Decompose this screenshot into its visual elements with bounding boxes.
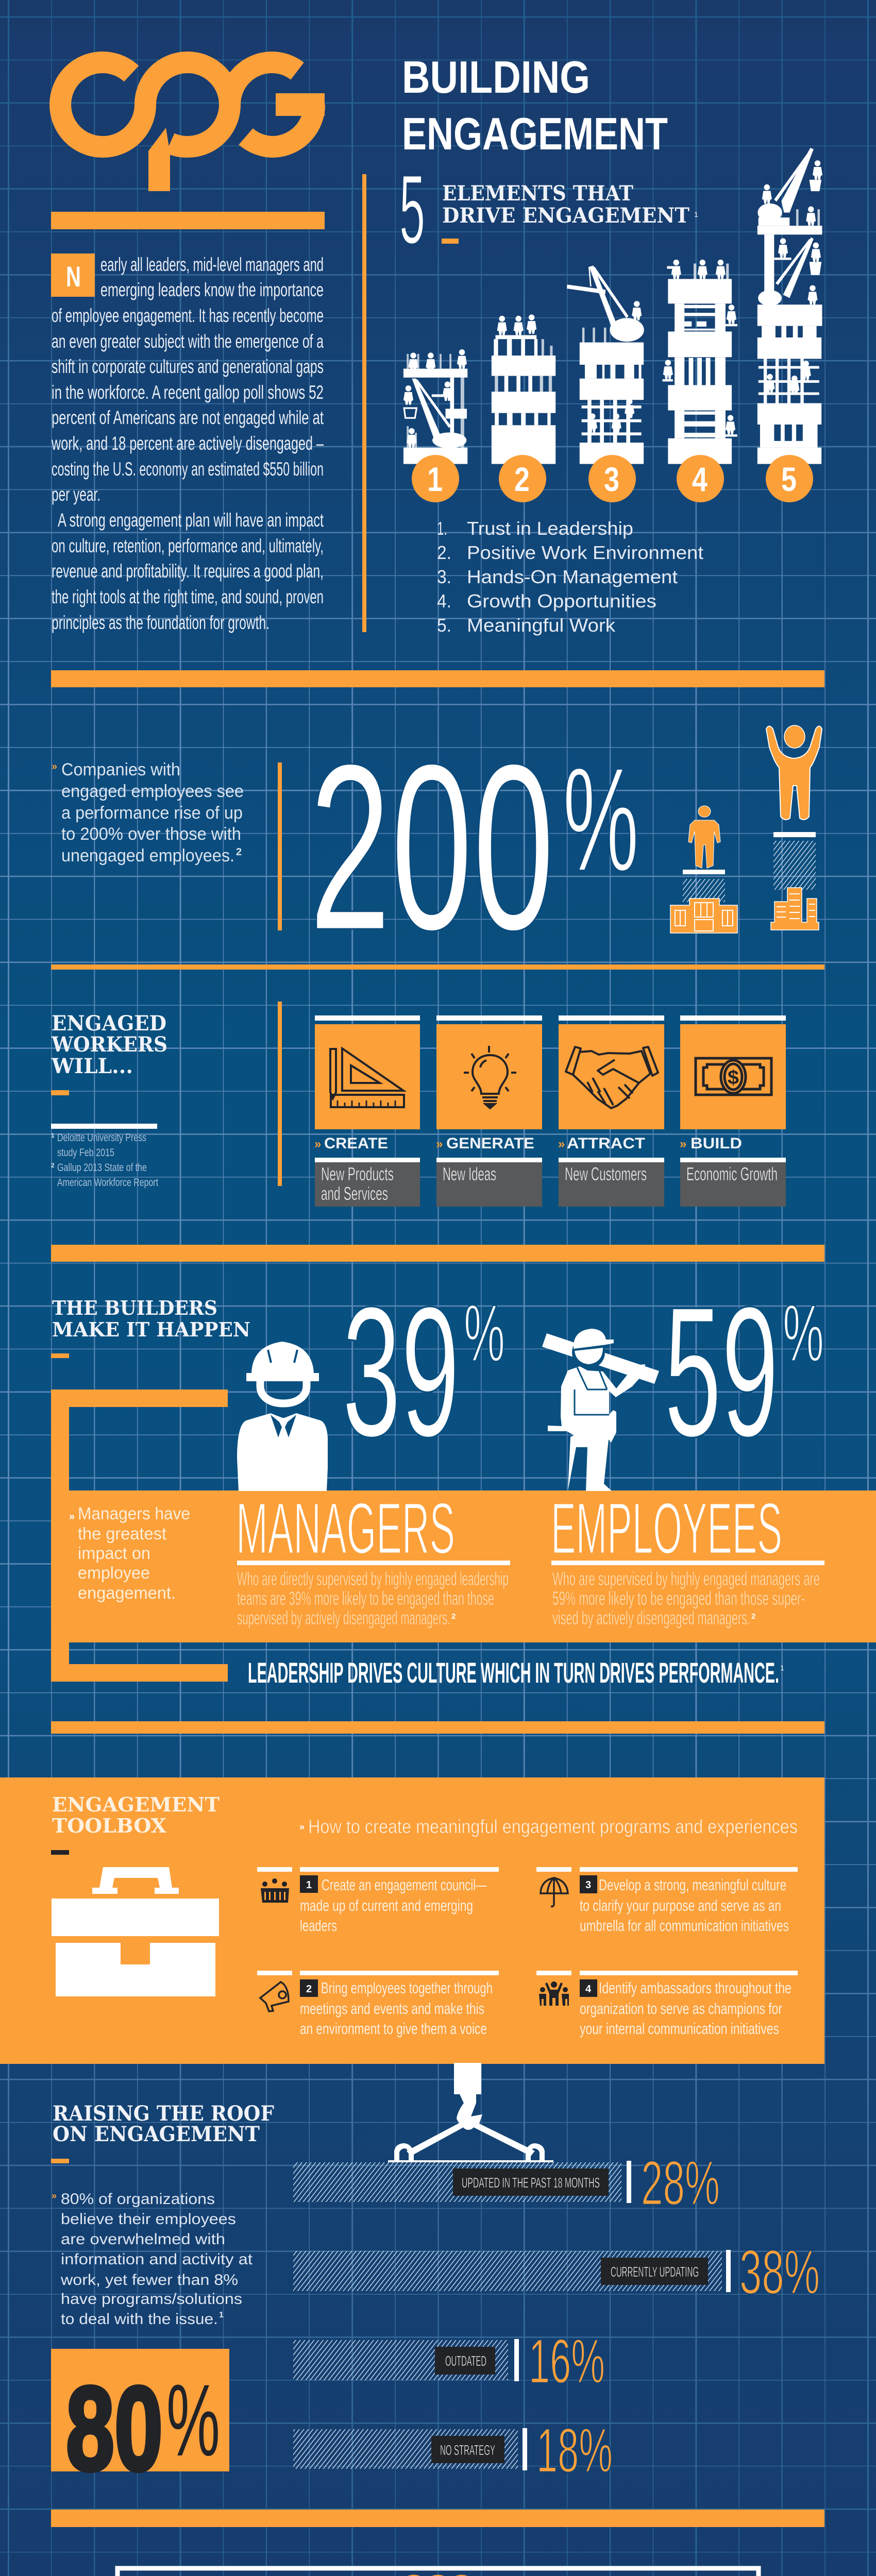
intro text block: of employee engagement. It has recently become bbox=[52, 305, 324, 326]
list: five elements: Meaningful Work bbox=[467, 615, 616, 636]
vertical divider bbox=[278, 1002, 282, 1186]
text block: 80 percent of organizations: are overwhelmed with bbox=[61, 2231, 225, 2248]
big number 200%: % bbox=[563, 737, 639, 903]
section bar bbox=[51, 670, 824, 687]
intro line: How to create meaningful engagement programs and experiences bbox=[308, 1816, 798, 1837]
intro text block: per year. bbox=[52, 484, 100, 505]
big number 200%: 200 bbox=[309, 715, 554, 979]
intro line: » bbox=[299, 1822, 305, 1832]
heading accent dash bbox=[51, 1090, 69, 1095]
item 2 bbox=[257, 1971, 499, 2038]
text block: 80 percent of organizations bbox=[52, 2191, 253, 2328]
intro text block: early all leaders, mid-level managers and bbox=[100, 254, 324, 275]
card: generate: New Ideas bbox=[443, 1163, 496, 1184]
icon: people group bbox=[261, 1878, 289, 1903]
heading: 5 elements: DRIVE ENGAGEMENT bbox=[442, 204, 689, 228]
text block: managers impact: Managers have bbox=[78, 1504, 190, 1523]
icon: ambassadors bbox=[539, 1981, 569, 2006]
item 1: made up of current and emerging bbox=[300, 1896, 473, 1914]
icon: megaphone bbox=[260, 1982, 289, 2011]
list: five elements: 3. bbox=[437, 566, 451, 587]
chart: five building towers bbox=[403, 148, 822, 464]
stat: 59 percent: 59 bbox=[664, 1268, 779, 1476]
list: five elements: Positive Work Environment bbox=[467, 542, 703, 563]
managers label and text bbox=[236, 1487, 510, 1629]
stat: 59 percent: % bbox=[783, 1288, 824, 1379]
bar: currently updating bbox=[293, 2237, 820, 2307]
intro text block: the right tools at the right time, and sound, proven bbox=[52, 586, 324, 607]
item 2: Bring employees together through bbox=[321, 1979, 493, 1997]
item 3: Develop a strong, meaningful culture bbox=[599, 1876, 786, 1894]
heading: ON ENGAGEMENT bbox=[53, 2122, 260, 2146]
list: five elements: 1. bbox=[437, 518, 447, 539]
item 1 bbox=[257, 1867, 499, 1935]
text block: companies: Companies with bbox=[61, 760, 180, 779]
icon: toolbox bbox=[52, 1867, 219, 1996]
icon: ruler and pencil bbox=[330, 1048, 404, 1107]
item 3: umbrella for all communication initiatives bbox=[580, 1917, 789, 1935]
item 4: your internal communication initiatives bbox=[580, 2020, 779, 2038]
card: create: » bbox=[314, 1137, 321, 1151]
vertical divider bbox=[278, 762, 282, 930]
heading accent dash bbox=[51, 2159, 69, 2163]
stat box: 80 percent: % bbox=[166, 2363, 220, 2477]
card: generate bbox=[436, 1015, 542, 1207]
footnotes: Gallup 2013 State of the bbox=[57, 1162, 147, 1174]
card: create: New Products bbox=[321, 1163, 394, 1184]
intro text block: shift in corporate cultures and generational gaps bbox=[52, 356, 324, 377]
orange bracket and band bbox=[51, 1389, 876, 1682]
item 3 bbox=[536, 1867, 798, 1935]
tower 4 bbox=[663, 260, 737, 464]
bar: no strategy bbox=[293, 2415, 613, 2485]
item 4: organization to serve as champions for bbox=[580, 1999, 782, 2018]
panel: engagement toolbox bbox=[0, 1777, 824, 2064]
item 1: Create an engagement council— bbox=[322, 1876, 487, 1894]
list: five elements: 5. bbox=[437, 615, 451, 636]
heading: RAISING THE ROOF bbox=[53, 2102, 274, 2126]
card: generate: » bbox=[436, 1137, 443, 1151]
intro text block: revenue and profitability. It requires a good plan, bbox=[52, 561, 324, 582]
item 1: 1 bbox=[306, 1879, 312, 1891]
text block: managers impact: engagement. bbox=[78, 1583, 176, 1602]
panel: the builders bbox=[51, 1268, 876, 1689]
drop cap: N bbox=[66, 260, 81, 293]
panel: 200 percent bbox=[52, 715, 822, 979]
footnotes: American Workforce Report bbox=[57, 1177, 158, 1189]
heading: 5 elements: 1 bbox=[694, 210, 698, 218]
text block: managers impact: impact on bbox=[78, 1544, 150, 1563]
tower 1 bbox=[403, 349, 467, 464]
card: build: $ bbox=[728, 1067, 739, 1089]
intro text block: emerging leaders know the importance bbox=[100, 279, 324, 300]
heading: THE BUILDERS bbox=[52, 1296, 217, 1319]
leadership statement: 1 bbox=[780, 1664, 784, 1672]
item 4: 4 bbox=[585, 1984, 592, 1995]
footnotes: 1 bbox=[51, 1132, 55, 1139]
panel: header and intro bbox=[51, 52, 822, 636]
card: generate: GENERATE bbox=[446, 1135, 534, 1152]
list: five elements: 2. bbox=[437, 542, 451, 563]
intro text block: on culture, retention, performance and, ultimately, bbox=[52, 535, 324, 556]
card: build bbox=[680, 1015, 786, 1207]
number badges: 1 bbox=[427, 460, 443, 498]
heading: MAKE IT HAPPEN bbox=[52, 1318, 250, 1341]
card: build: BUILD bbox=[690, 1135, 742, 1152]
section bar bbox=[51, 1245, 824, 1262]
item 3: 3 bbox=[585, 1879, 591, 1891]
text block: 80 percent of organizations: have programs/solutions bbox=[61, 2291, 242, 2308]
heading: 5 elements bbox=[399, 155, 698, 264]
stat: 39 percent: 39 bbox=[342, 1268, 460, 1476]
bar: updated in the past 18 months: 28% bbox=[641, 2148, 720, 2218]
divider bar under logo bbox=[51, 212, 325, 229]
footnotes: Deloitte University Press bbox=[57, 1132, 146, 1144]
number badges: 4 bbox=[692, 460, 707, 498]
section bar bbox=[51, 1721, 824, 1734]
text block: managers impact bbox=[69, 1504, 190, 1602]
text block: managers impact: » bbox=[69, 1511, 75, 1522]
section bar bbox=[51, 2510, 824, 2527]
stat: 39 percent: % bbox=[464, 1288, 505, 1379]
card: build: Economic Growth bbox=[686, 1163, 778, 1184]
stat box: 80 percent bbox=[51, 2349, 229, 2496]
item 1: leaders bbox=[300, 1917, 337, 1935]
icon: small person on small building bbox=[670, 806, 737, 933]
employees label and text bbox=[551, 1487, 824, 1629]
card: create bbox=[314, 1015, 420, 1207]
bar: currently updating: 38% bbox=[739, 2237, 820, 2307]
heading: ENGAGED bbox=[52, 1011, 166, 1036]
panel: footer contact card bbox=[117, 2568, 759, 2576]
tower 3 bbox=[567, 265, 644, 464]
text block: companies: 2 bbox=[236, 846, 242, 858]
heading: WORKERS bbox=[51, 1032, 167, 1057]
heading bbox=[52, 1296, 250, 1341]
list: five elements: Hands-On Management bbox=[467, 566, 678, 587]
panel: raising the roof bbox=[51, 2063, 820, 2496]
item 4: Identify ambassadors throughout the bbox=[599, 1979, 791, 1997]
item 2: an environment to give them a voice bbox=[300, 2020, 487, 2038]
list: five elements: Trust in Leadership bbox=[467, 518, 633, 539]
section bar bbox=[51, 964, 824, 970]
number badges bbox=[412, 455, 813, 502]
tower 2 bbox=[492, 314, 555, 464]
managers label and text: teams are 39% more likely to be engaged than those bbox=[237, 1588, 494, 1609]
icon: umbrella bbox=[541, 1878, 568, 1906]
intro text block: work, and 18 percent are actively disengaged – bbox=[51, 433, 324, 454]
text block: 80 percent of organizations: to deal with the issue. bbox=[61, 2311, 218, 2328]
icon: crane hook bbox=[388, 2063, 553, 2162]
card: attract bbox=[558, 1015, 664, 1207]
list: five elements: 4. bbox=[437, 590, 451, 612]
managers label and text: supervised by actively disengaged managers. bbox=[237, 1607, 450, 1629]
footnotes bbox=[51, 1124, 158, 1189]
bar: updated in the past 18 months: UPDATED IN THE PAST 18 MONTHS bbox=[462, 2175, 600, 2191]
icon: tall person on tall building bbox=[766, 725, 822, 930]
intro text block: an even greater subject with the emergence of a bbox=[52, 331, 324, 352]
intro text block: A strong engagement plan will have an impact bbox=[58, 510, 324, 531]
number badges: 3 bbox=[604, 460, 619, 498]
heading: ENGAGEMENT bbox=[52, 1793, 220, 1816]
text block: 80 percent of organizations: believe their employees bbox=[61, 2211, 236, 2228]
intro text block: costing the U.S. economy an estimated $550 billion bbox=[52, 459, 324, 480]
managers label and text: 2 bbox=[451, 1612, 456, 1621]
text block: companies: to 200% over those with bbox=[61, 824, 241, 844]
title bbox=[402, 52, 668, 159]
card: build: » bbox=[680, 1137, 686, 1151]
text block: managers impact: the greatest bbox=[78, 1524, 166, 1543]
list: five elements: Growth Opportunities bbox=[467, 590, 656, 612]
text block: companies: unengaged employees. bbox=[61, 846, 234, 866]
bar: no strategy: NO STRATEGY bbox=[440, 2442, 495, 2458]
icon: worker figure bbox=[542, 1329, 659, 1491]
intro text block: percent of Americans are not engaged while at bbox=[52, 407, 324, 428]
text block: 80 percent of organizations: » bbox=[52, 2191, 57, 2201]
heading: 5 elements: ELEMENTS THAT bbox=[442, 181, 633, 206]
number badges: 5 bbox=[781, 460, 797, 498]
heading: TOOLBOX bbox=[52, 1814, 167, 1837]
icon: CPG logo bbox=[60, 62, 325, 191]
bar: outdated bbox=[293, 2326, 605, 2396]
drop cap bbox=[51, 253, 95, 297]
title: BUILDING bbox=[402, 52, 590, 103]
icon: light bulb bbox=[464, 1046, 516, 1108]
text block: 80 percent of organizations: 80% of organizations bbox=[61, 2191, 215, 2208]
card: attract: New Customers bbox=[565, 1163, 647, 1184]
list: five elements bbox=[437, 518, 703, 636]
card: attract: » bbox=[558, 1137, 565, 1151]
footnotes: study Feb 2015 bbox=[57, 1147, 114, 1159]
heading bbox=[51, 1011, 167, 1078]
employees label and text: 2 bbox=[751, 1612, 755, 1621]
number badges: 2 bbox=[514, 460, 530, 498]
bar: no strategy: 18% bbox=[536, 2415, 613, 2485]
item 4 bbox=[536, 1971, 798, 2038]
heading bbox=[52, 1793, 220, 1837]
intro text block: in the workforce. A recent gallop poll shows 52 bbox=[52, 382, 324, 403]
item 2: 2 bbox=[306, 1984, 312, 1995]
text block: companies: a performance rise of up bbox=[61, 803, 243, 823]
card: create: CREATE bbox=[324, 1135, 388, 1152]
intro text block bbox=[51, 253, 324, 633]
heading bbox=[53, 2102, 274, 2146]
managers label and text: MANAGERS bbox=[236, 1487, 455, 1569]
managers label and text: Who are directly supervised by highly engaged leadership bbox=[237, 1568, 509, 1589]
text block: managers impact: employee bbox=[78, 1563, 150, 1582]
heading accent dash bbox=[51, 1850, 69, 1855]
card: create: and Services bbox=[321, 1183, 388, 1204]
tower 5 bbox=[757, 148, 822, 464]
heading accent dash bbox=[51, 1353, 69, 1358]
item 2: meetings and events and make this bbox=[300, 1999, 484, 2018]
stat box: 80 percent: 80 bbox=[66, 2362, 163, 2496]
intro text block: principles as the foundation for growth. bbox=[52, 612, 269, 633]
icon: manager figure bbox=[237, 1342, 328, 1491]
icon: handshake bbox=[566, 1047, 658, 1108]
bar: updated in the past 18 months bbox=[293, 2148, 720, 2218]
heading: WILL... bbox=[51, 1054, 133, 1078]
vertical divider bbox=[362, 174, 366, 632]
heading: 5 elements: 5 bbox=[399, 155, 425, 264]
text block: companies bbox=[52, 760, 244, 866]
card: attract: ATTRACT bbox=[567, 1135, 645, 1152]
bar: outdated: OUTDATED bbox=[445, 2353, 486, 2369]
bar: currently updating: CURRENTLY UPDATING bbox=[611, 2264, 699, 2280]
text block: companies: engaged employees see bbox=[61, 782, 244, 801]
item 3: to clarify your purpose and serve as an bbox=[580, 1896, 781, 1914]
text block: companies: » bbox=[52, 761, 57, 772]
footnotes: 2 bbox=[51, 1162, 55, 1169]
title: ENGAGEMENT bbox=[402, 108, 668, 159]
icon: dollar bill bbox=[696, 1058, 771, 1095]
bar: outdated: 16% bbox=[529, 2326, 605, 2396]
text block: 80 percent of organizations: information and activity at bbox=[61, 2251, 253, 2268]
text block: 80 percent of organizations: work, yet fewer than 8% bbox=[60, 2272, 238, 2289]
panel: engaged workers will bbox=[51, 1002, 786, 1207]
text block: 80 percent of organizations: 1 bbox=[219, 2311, 224, 2319]
